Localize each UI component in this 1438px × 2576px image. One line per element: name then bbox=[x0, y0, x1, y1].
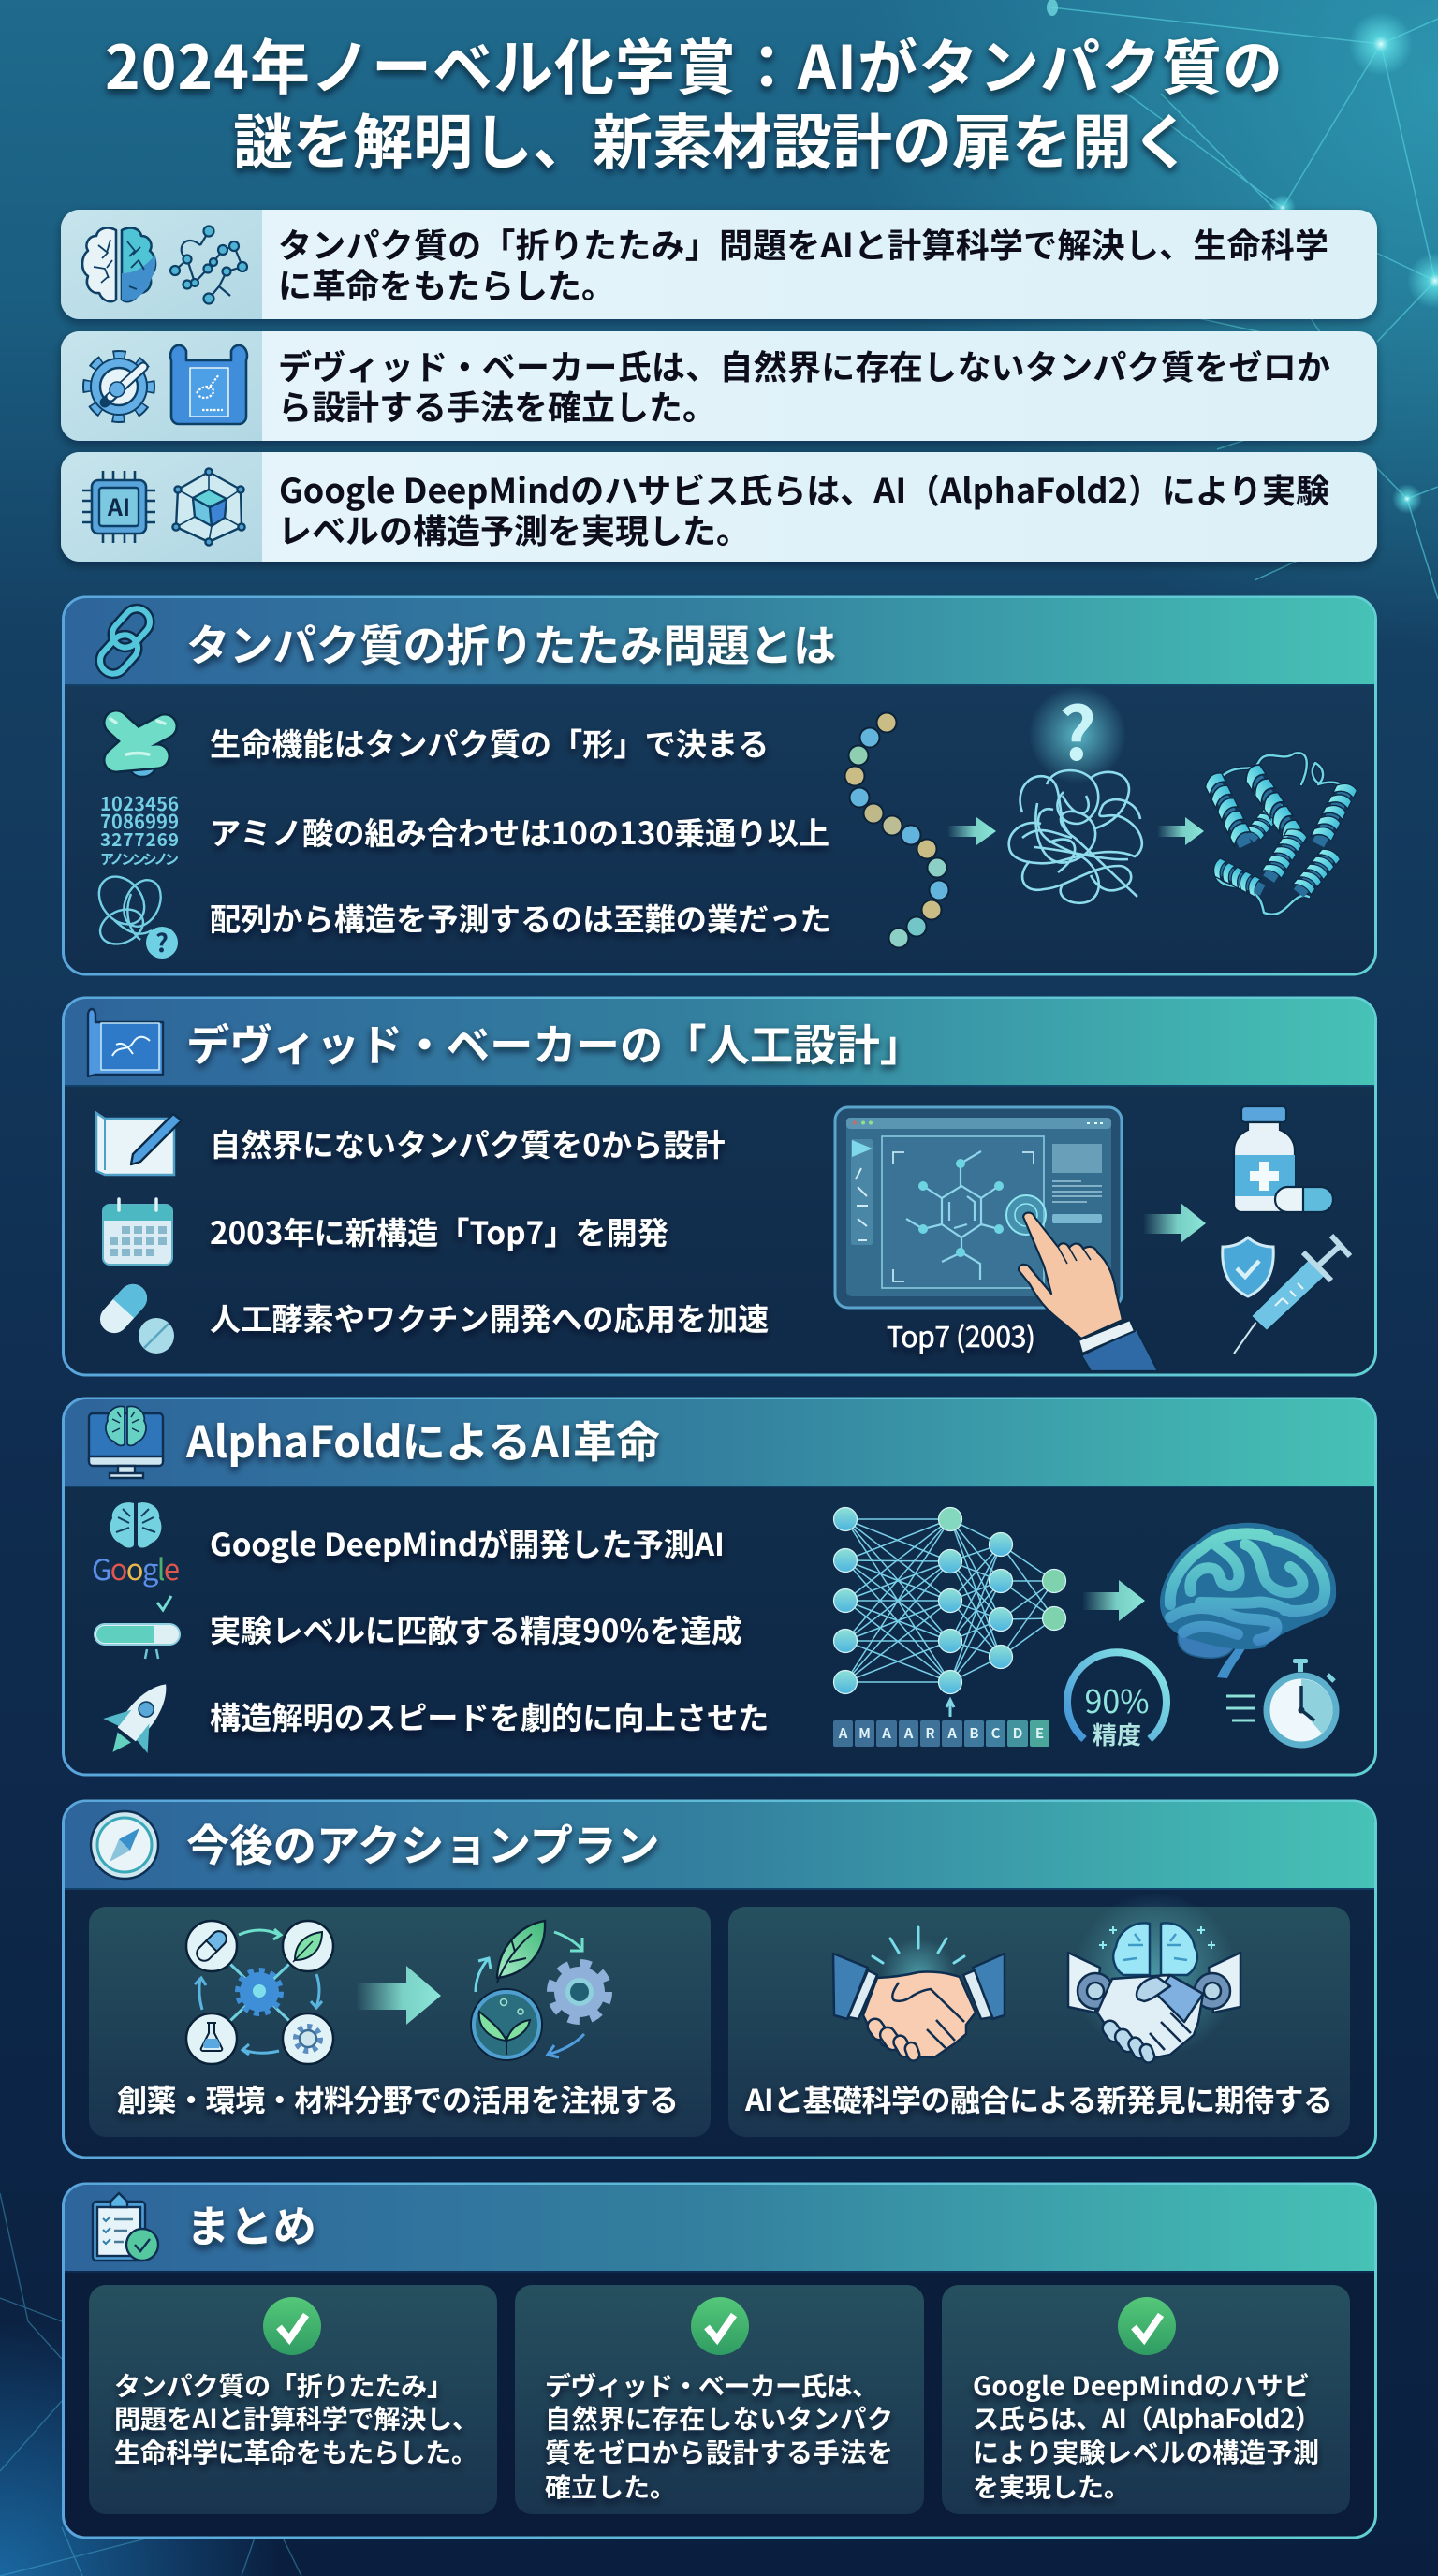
summary text: デヴィッド・ベーカー氏は、 bbox=[545, 2366, 878, 2404]
icon: check bbox=[691, 2297, 749, 2355]
key point text 2 bbox=[278, 341, 1330, 430]
icon: paper and pen bbox=[96, 1113, 182, 1175]
arrow bbox=[1143, 1203, 1206, 1243]
bullet text: 生命機能はタンパク質の「形」で決まる bbox=[210, 719, 769, 765]
icon: Google brain bbox=[92, 1502, 180, 1588]
sequence strip: A bbox=[881, 1723, 891, 1743]
panel: AlphaFold bbox=[64, 1398, 1376, 1775]
summary text: 生命科学に革命をもたらした。 bbox=[114, 2433, 477, 2470]
title: 2024年ノーベル化学賞：AIがタンパク質の bbox=[105, 21, 1283, 107]
bullet text: 構造解明のスピードを劇的に向上させた bbox=[210, 1692, 769, 1738]
heading: タンパク質の折りたたみ問題とは bbox=[186, 611, 836, 674]
bullet text bbox=[210, 1519, 769, 1738]
section header bbox=[65, 1399, 1374, 1487]
heading: AlphaFoldによるAI革命 bbox=[185, 1408, 660, 1471]
card text: AIと基礎科学の融合による新発見に期待する bbox=[744, 2077, 1333, 2120]
icon: environment and materials cycle bbox=[471, 1921, 607, 2060]
key point text 3: Google DeepMindのハサビス氏らは、AI（AlphaFold2）により実験 bbox=[279, 464, 1329, 513]
section header bbox=[65, 598, 1374, 686]
icon: number sequences bbox=[100, 789, 179, 869]
sequence strip: A bbox=[946, 1723, 957, 1743]
arrow bbox=[1157, 817, 1204, 845]
summary text: 問題をAIと計算科学で解決し、 bbox=[114, 2399, 478, 2437]
icon: rocket bbox=[91, 1667, 188, 1769]
gauge: 90 percent accuracy: 精度 bbox=[1093, 1717, 1141, 1751]
icon: gear with tool bbox=[89, 357, 149, 417]
diagram: neural network bbox=[833, 1507, 1065, 1717]
icon: compass bbox=[91, 1811, 158, 1879]
heading: まとめ bbox=[186, 2192, 316, 2255]
card text: 創薬・環境・材料分野での活用を注視する bbox=[117, 2077, 679, 2120]
icon: tangle with question bbox=[90, 868, 178, 959]
sequence strip: M bbox=[858, 1723, 871, 1743]
panel: action plan bbox=[64, 1801, 1376, 2158]
sequence strip: A bbox=[903, 1723, 914, 1743]
panel: summary bbox=[64, 2184, 1376, 2538]
sequence strip: C bbox=[991, 1723, 1001, 1743]
key point text 1 bbox=[278, 219, 1328, 308]
bullet text: 実験レベルに匹敵する精度90%を達成 bbox=[210, 1605, 742, 1651]
icon: large brain bbox=[1160, 1523, 1336, 1678]
summary text: を実現した。 bbox=[973, 2467, 1130, 2505]
card: summary 3 bbox=[942, 2285, 1350, 2514]
icon: brain bbox=[82, 228, 155, 301]
card: AI and basic science bbox=[728, 1893, 1350, 2137]
icon: syringe bbox=[1234, 1236, 1350, 1354]
diagram: design tablet bbox=[835, 1107, 1122, 1308]
icon: protein molecule bbox=[170, 227, 247, 303]
sequence strip bbox=[833, 1720, 1049, 1747]
icon: pills bbox=[95, 1279, 174, 1354]
icon: protein blob bbox=[110, 719, 165, 777]
icon: question mark glow bbox=[1029, 677, 1126, 783]
key point text 3 bbox=[278, 464, 1329, 553]
heading: 今後のアクションプラン bbox=[186, 1811, 660, 1874]
icon: check bbox=[1118, 2297, 1176, 2355]
diagram: tangled chain bbox=[1009, 770, 1142, 903]
key point text 2: ら設計する手法を確立した。 bbox=[278, 381, 716, 430]
icon: cube bbox=[172, 468, 245, 546]
diagram: amino acid chain bbox=[844, 713, 949, 947]
icon: shield bbox=[1223, 1237, 1273, 1296]
summary text bbox=[545, 2366, 893, 2505]
icon: chain link bbox=[95, 604, 155, 679]
key point row 3 bbox=[61, 452, 1377, 562]
icon: robot handshake with brain bbox=[1068, 1893, 1240, 2064]
card: application fields bbox=[89, 1907, 711, 2137]
summary text: 自然界に存在しないタンパク bbox=[545, 2399, 893, 2437]
sequence strip: B bbox=[969, 1723, 979, 1743]
caption: Top7 (2003) bbox=[887, 1314, 1035, 1355]
panel: David Baker design bbox=[64, 998, 1376, 1375]
icon: tangle with question: ? bbox=[155, 923, 169, 959]
gauge: 90 percent accuracy: 90% bbox=[1084, 1676, 1150, 1722]
icon: check bbox=[263, 2297, 321, 2355]
key point row 1 bbox=[61, 210, 1377, 319]
icon: field cycle bbox=[186, 1921, 333, 2064]
bullet text: アミノ酸の組み合わせは10の130乗通り以上 bbox=[210, 808, 829, 854]
section header bbox=[65, 1802, 1374, 1890]
panel: folding problem bbox=[64, 597, 1376, 974]
icon: number sequences: 7086999 bbox=[100, 807, 179, 834]
section header bbox=[65, 999, 1374, 1087]
sequence strip: E bbox=[1035, 1723, 1044, 1743]
arrow bbox=[947, 817, 996, 845]
summary text: 確立した。 bbox=[545, 2467, 676, 2505]
arrow bbox=[356, 1966, 441, 2025]
summary text bbox=[114, 2366, 478, 2470]
summary text: タンパク質の「折りたたみ」 bbox=[114, 2366, 453, 2404]
arrow bbox=[1082, 1580, 1145, 1621]
icon: number sequences: 1023456 bbox=[100, 789, 179, 816]
icon: stopwatch bbox=[1226, 1659, 1336, 1745]
summary text: ス氏らは、AI（AlphaFold2） bbox=[973, 2399, 1321, 2437]
icon: blueprint bbox=[88, 1009, 163, 1076]
icon: human handshake bbox=[833, 1927, 1005, 2062]
sequence strip: R bbox=[925, 1723, 935, 1743]
icon: monitor with brain bbox=[89, 1406, 163, 1478]
icon: AI chip: AI bbox=[107, 490, 130, 523]
sequence strip: D bbox=[1013, 1723, 1022, 1743]
icon: calendar bbox=[103, 1199, 172, 1265]
title bbox=[105, 21, 1283, 182]
key point row 2 bbox=[61, 331, 1377, 441]
icon: clipboard with check bbox=[93, 2193, 158, 2261]
gauge: 90 percent accuracy bbox=[1067, 1652, 1167, 1751]
icon: number sequences: 3277269 bbox=[100, 827, 179, 852]
heading: デヴィッド・ベーカーの「人工設計」 bbox=[186, 1011, 923, 1074]
icon: number sequences: アノンンシノン bbox=[100, 849, 179, 869]
icon: pointing hand bbox=[1019, 1213, 1158, 1371]
bullet text: 自然界にないタンパク質を0から設計 bbox=[210, 1120, 726, 1165]
section header bbox=[65, 2185, 1374, 2273]
key point text 1: に革命をもたらした。 bbox=[278, 259, 615, 308]
title: 謎を解明し、新素材設計の扉を開く bbox=[233, 95, 1192, 182]
icon: medicine bottle and pill bbox=[1234, 1106, 1333, 1212]
card: summary 2 bbox=[515, 2285, 924, 2514]
icon: blueprint bbox=[170, 345, 247, 424]
card: summary 1 bbox=[89, 2285, 497, 2514]
sequence strip: A bbox=[838, 1723, 848, 1743]
key point text 1: タンパク質の「折りたたみ」問題をAIと計算科学で解決し、生命科学 bbox=[278, 219, 1328, 268]
bullet text bbox=[210, 719, 831, 940]
summary text: Google DeepMindのハサビ bbox=[973, 2366, 1310, 2404]
summary text: により実験レベルの構造予測 bbox=[973, 2433, 1319, 2470]
icon: Google brain: Google bbox=[92, 1546, 180, 1588]
bullet text: Google DeepMindが開発した予測AI bbox=[210, 1519, 725, 1565]
bullet text: 2003年に新構造「Top7」を開発 bbox=[210, 1208, 668, 1253]
summary text: 質をゼロから設計する手法を bbox=[545, 2433, 893, 2470]
icon: progress bar bbox=[95, 1596, 180, 1659]
key point text 3: レベルの構造予測を実現した。 bbox=[278, 505, 750, 553]
diagram: folded protein ribbon bbox=[1202, 753, 1358, 915]
icon: AI chip bbox=[82, 471, 155, 543]
key point text 2: デヴィッド・ベーカー氏は、自然界に存在しないタンパク質をゼロか bbox=[278, 341, 1330, 389]
bullet text bbox=[210, 1120, 769, 1339]
bullet text: 人工酵素やワクチン開発への応用を加速 bbox=[210, 1294, 769, 1339]
icon: question mark glow: ? bbox=[1059, 677, 1096, 782]
bullet text: 配列から構造を予測するのは至難の業だった bbox=[210, 894, 831, 940]
summary text bbox=[973, 2366, 1321, 2505]
